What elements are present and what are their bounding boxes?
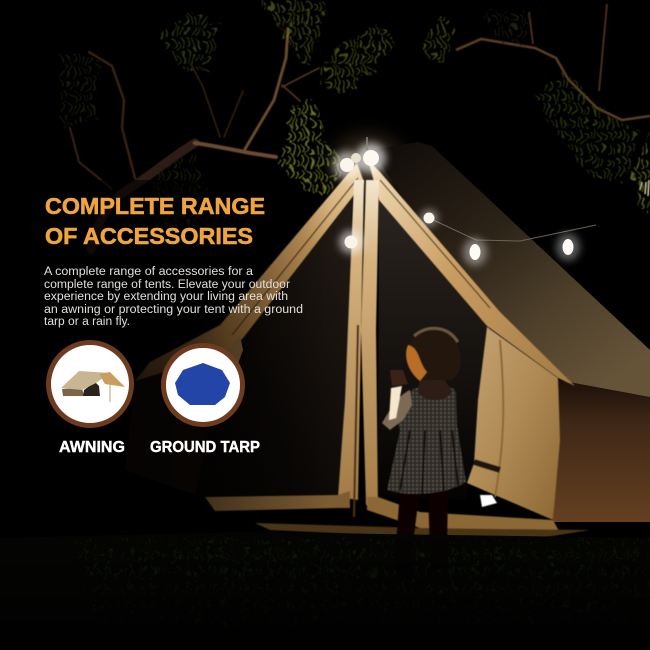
- tent: left rear skirt: [125, 335, 240, 495]
- tent: left inner panel: [195, 195, 352, 497]
- tent: right inner panel: [378, 195, 490, 500]
- title: COMPLETE RANGE: [45, 193, 265, 219]
- tent: left roof band: [135, 163, 364, 381]
- darkening overlays: [0, 180, 650, 650]
- label: awning: AWNING: [59, 439, 125, 456]
- body text: [44, 266, 303, 328]
- awning tent roof: [61, 371, 110, 390]
- girl: [382, 328, 466, 552]
- awning tent body: [62, 388, 84, 396]
- tent: center door strips: [338, 180, 379, 517]
- string light wire: [429, 218, 596, 241]
- tent: left tie-back: [222, 335, 243, 392]
- girl: arm: [382, 390, 412, 430]
- body text: A complete range of accessories for a: [44, 266, 254, 278]
- body text: tarp or a rain fly.: [44, 316, 130, 328]
- body text: complete range of tents. Elevate your outdoor: [44, 279, 290, 291]
- tent: glow around apex: [332, 135, 404, 195]
- label: ground tarp: GROUND TARP: [150, 439, 260, 456]
- tree branches: left tree: [70, 29, 319, 250]
- tree branches: right tree: [456, 4, 650, 196]
- body text: experience by extending your living area with: [44, 291, 288, 303]
- awning pole: [109, 375, 111, 402]
- girl: back of neck: [417, 380, 452, 400]
- girl: dress: [387, 385, 466, 494]
- girl: lit curls: [406, 345, 427, 381]
- girl: lantern: [390, 370, 408, 386]
- tent: right wall: [553, 380, 650, 522]
- title: OF ACCESSORIES: [45, 223, 253, 249]
- tent: rear roof: [372, 142, 650, 397]
- grass: [0, 532, 650, 650]
- icon: awning tent: [48, 342, 132, 426]
- girl: dress pleats: [400, 430, 458, 494]
- tree foliage: right tree: [422, 10, 650, 215]
- tree foliage: left tree: [60, 0, 394, 240]
- girl: legs: [396, 490, 448, 552]
- girl: hair: [406, 330, 461, 380]
- icon: ground tarp: [164, 346, 242, 424]
- awning fly: [99, 372, 125, 387]
- tent: bottom trim: [205, 491, 590, 538]
- lights: string bulbs and apex lamps: [333, 137, 580, 266]
- body text: an awning or protecting your tent with a ground: [44, 304, 303, 316]
- title: [45, 193, 265, 249]
- tent: right roof band: [368, 160, 575, 386]
- tent: right door flap: [467, 327, 560, 520]
